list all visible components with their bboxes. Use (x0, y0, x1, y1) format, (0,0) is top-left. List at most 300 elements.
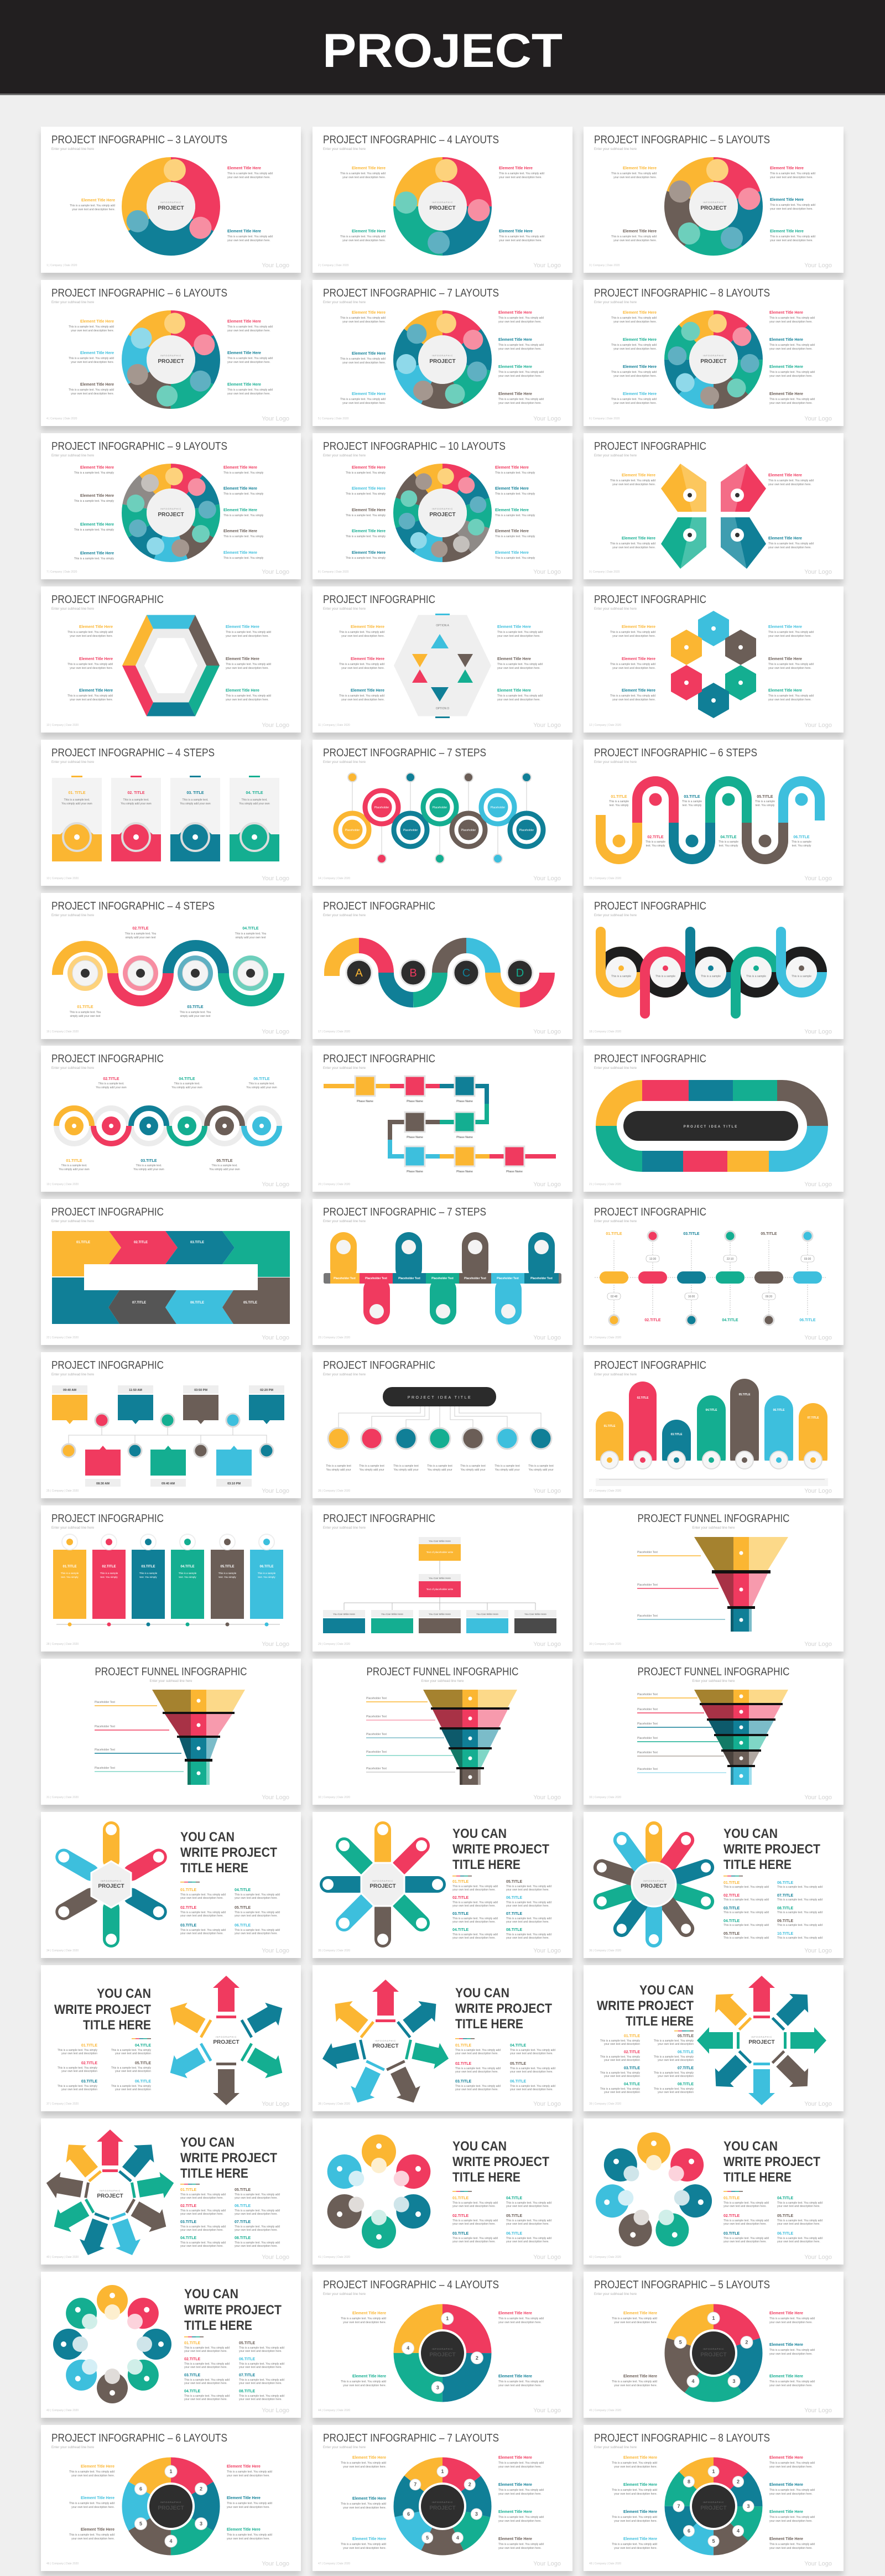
item grid: This is a sample text. You simply (654, 2087, 694, 2091)
footer: 2 | Company | Date 2020 (318, 264, 349, 267)
text items: your own text and description here. (769, 2465, 813, 2469)
text items: your own text and description here. (614, 2520, 657, 2523)
text items (339, 625, 543, 702)
donut chart: PROJECT (429, 205, 456, 211)
text items: Element Title Here (498, 338, 532, 342)
band labels: 05.TITLE (243, 1301, 257, 1305)
footer (589, 416, 832, 422)
funnel labels: Placeholder Text (95, 1748, 115, 1752)
donut chart: 6 (139, 2486, 142, 2492)
item grid: 03.TITLE (180, 2220, 197, 2224)
text items: your own text and description here. (769, 375, 813, 378)
text items: Element Title Here (498, 365, 532, 369)
text items: This is a sample text. You simply add (768, 694, 814, 698)
footer (318, 1181, 561, 1188)
footer (46, 1641, 289, 1648)
donut chart: INFOGRAPHIC (432, 354, 453, 357)
text items: Element Title Here (770, 198, 804, 202)
slide: org chart (313, 1505, 572, 1651)
text items: Element Title Here (227, 230, 261, 233)
item grid: your own text and description here. (239, 2398, 282, 2401)
item grid: 08.TITLE (239, 2390, 256, 2393)
item grid: 01.TITLE (184, 2341, 201, 2345)
title block: WRITE PROJECT (723, 1842, 820, 1857)
donut chart: PROJECT (158, 359, 184, 365)
arrows diagram: INFOGRAPHIC (375, 2039, 396, 2042)
funnel labels: Placeholder Text (366, 1715, 387, 1718)
item grid: This is a sample text. You simply (58, 2066, 97, 2070)
slide title (323, 134, 499, 151)
text items: Element Title Here (495, 466, 529, 470)
item grid: your own text and description (115, 2088, 151, 2091)
footer: Your Logo (804, 722, 832, 729)
text items: This is a sample text. You simply (495, 557, 535, 560)
donut chart (397, 468, 488, 558)
step cards: This is a sample text. (242, 798, 267, 802)
item grid: your own text and description here. (235, 1932, 278, 1935)
footer (589, 1947, 832, 1954)
footer (46, 262, 289, 269)
text items: Element Title Here (223, 551, 257, 555)
text items: Element Title Here (769, 2456, 803, 2460)
text items: Element Title Here (227, 2465, 261, 2469)
labels: This is a sample text. (212, 1164, 237, 1167)
item grid: 01.TITLE (723, 1881, 740, 1885)
text items: Element Title Here (769, 2510, 803, 2514)
slide: time pills timeline (584, 1199, 844, 1345)
footer (589, 2101, 832, 2107)
slide: 6 columns (41, 1505, 301, 1651)
item grid: This is a sample text. You simply add (506, 1917, 551, 1920)
item grid: 04.TITLE (235, 1888, 251, 1892)
text items: This is a sample text. You simply add (611, 344, 657, 347)
time boxes: 09:40 AM (162, 1482, 175, 1486)
footer: Your Logo (262, 416, 289, 422)
text items: your own text and description here. (498, 2321, 542, 2324)
title block (184, 2287, 282, 2337)
ribbon (332, 946, 547, 1000)
text items: This is a sample text. You simply (346, 514, 386, 517)
item grid: your own text and description here. (235, 2245, 278, 2248)
text items: Element Title Here (497, 657, 531, 661)
funnel labels: Placeholder Text (366, 1697, 387, 1700)
text items: This is a sample text. You simply add (499, 235, 544, 238)
donut chart: 6 (688, 2528, 690, 2534)
letter circles: A (355, 967, 363, 979)
donut chart: 1 (712, 2469, 715, 2474)
phase labels: Phase Name (456, 1100, 473, 1103)
timeline: 16:00 (688, 1295, 695, 1299)
slide title: PROJECT INFOGRAPHIC (594, 1053, 706, 1065)
text items: your own text and description here. (768, 698, 811, 702)
timeline: 09:20 (766, 1295, 772, 1299)
title block: TITLE HERE (452, 1857, 520, 1872)
footer: Your Logo (262, 722, 289, 729)
item grid: This is a sample text. You simply add (506, 2201, 551, 2205)
slide title: Enter your subhead line here (323, 914, 366, 917)
arms diagram: PROJECT (369, 1883, 396, 1889)
footer: Your Logo (262, 1334, 289, 1341)
item grid: This is a sample text. You simply add (777, 1886, 822, 1889)
bottom boxes: You Can Write Here (524, 1613, 546, 1616)
text items: This is a sample text. You simply (346, 535, 386, 538)
footer (46, 2101, 289, 2107)
slide title: PROJECT INFOGRAPHIC – 6 LAYOUTS (51, 287, 227, 299)
item grid: This is a sample text. You simply (58, 2049, 97, 2052)
title block (452, 1826, 549, 1877)
slide: funnel 6 (584, 1659, 844, 1805)
text items: Element Title Here (622, 625, 655, 629)
slide: 4 layouts dark (313, 2272, 572, 2418)
text items: This is a sample text. You simply add (340, 316, 386, 320)
item grid: 05.TITLE (678, 2034, 694, 2038)
text items: This is a sample text. You simply (346, 471, 386, 475)
labels: You simply add your own (246, 1086, 277, 1089)
footer (318, 1641, 561, 1648)
funnel labels: Placeholder Text (637, 1551, 658, 1554)
footer: 20 | Company | Date 2020 (318, 1183, 350, 1186)
funnel labels: Placeholder Text (95, 1767, 115, 1770)
slide title: Enter your subhead line here (421, 1680, 464, 1683)
text items: Element Title Here (223, 529, 257, 533)
slide title: Enter your subhead line here (323, 148, 366, 151)
hexagon cluster (671, 611, 756, 718)
ring chain: Placeholder (403, 829, 418, 832)
step labels: simply add your own text (125, 936, 156, 939)
text items: Element Title Here (227, 351, 261, 355)
slide title: PROJECT FUNNEL INFOGRAPHIC (637, 1666, 790, 1678)
slide title: Enter your subhead line here (692, 1680, 735, 1683)
donut chart: 3 (747, 2504, 750, 2509)
arms diagram: PROJECT (98, 1883, 124, 1889)
footer: 8 | Company | Date 2020 (318, 570, 349, 574)
text items: Element Title Here (623, 2510, 657, 2514)
slide: 6 layouts dark (41, 2425, 301, 2571)
donut chart: 3 (475, 2511, 478, 2517)
donut chart: PROJECT (429, 512, 456, 518)
text items: Element Title Here (81, 199, 115, 202)
text items (340, 167, 544, 242)
step labels: text. You simply (719, 844, 738, 848)
text items: your own text and description here. (499, 239, 542, 242)
donut chart: INFOGRAPHIC (432, 2501, 453, 2504)
arch bars: 06.TITLE (773, 1409, 785, 1412)
labels: You simply add your own (209, 1168, 240, 1171)
step labels: This is a sample (609, 800, 629, 803)
slide: time boxes (41, 1352, 301, 1498)
footer: 13 | Company | Date 2020 (46, 877, 79, 880)
ring chain: Placeholder (519, 829, 534, 832)
text items: your own text and description here. (227, 2537, 270, 2541)
title block (597, 1983, 694, 2032)
item grid: 03.TITLE (624, 2066, 640, 2070)
footer: 9 | Company | Date 2020 (589, 570, 620, 574)
text items: your own text and description here. (497, 635, 540, 638)
footer (46, 875, 289, 882)
arrows diagram: PROJECT (97, 2193, 123, 2199)
slide title: PROJECT INFOGRAPHIC (51, 594, 164, 606)
slide: 6 steps snake (584, 740, 844, 886)
footer: Your Logo (262, 1641, 289, 1648)
footer (46, 416, 289, 422)
labels: This is a sample text. (98, 1082, 124, 1086)
text items: your own text and description here. (227, 361, 270, 364)
footer: Your Logo (262, 1947, 289, 1954)
arrows diagram (320, 1980, 451, 2108)
item grid: your own text and description here. (180, 2245, 223, 2248)
text items: Element Title Here (768, 657, 802, 661)
text items: This is a sample text. You simply add (612, 2380, 657, 2383)
slide title: PROJECT INFOGRAPHIC (323, 1359, 435, 1372)
title block (455, 1986, 552, 2039)
step labels: 04.TITLE (720, 835, 737, 839)
slide: 7 steps timeline (313, 1199, 572, 1345)
branch text: You simply add your (428, 1468, 452, 1472)
item grid: 02.TITLE (452, 2214, 469, 2218)
item grid: This is a sample text. You simply (58, 2085, 97, 2088)
slide: 8 arrows text left (584, 1965, 844, 2111)
step labels: 03.TITLE (187, 1005, 204, 1009)
slide title: PROJECT INFOGRAPHIC (323, 1513, 435, 1525)
text items: your own text and description here. (342, 176, 386, 179)
slide title: Enter your subhead line here (323, 2293, 366, 2296)
footer: Your Logo (533, 2561, 561, 2567)
item grid: your own text and description here. (777, 2240, 820, 2243)
text items: This is a sample text. You simply (346, 557, 386, 560)
branch text (326, 1464, 554, 1472)
title block (452, 2139, 549, 2192)
timeline bar: Placeholder Text (334, 1277, 356, 1280)
text items: your own text and description here. (227, 392, 270, 396)
circles diagram (321, 2134, 437, 2248)
slide title (594, 1359, 706, 1377)
item grid: This is a sample text. You simply add (777, 1924, 822, 1927)
step cards: You simply add your own (121, 802, 152, 806)
item grid: This is a sample text. You simply add (777, 2219, 822, 2222)
slide title: PROJECT INFOGRAPHIC (51, 1513, 164, 1525)
text items: your own text and description here. (227, 2506, 270, 2509)
footer (46, 1181, 289, 1188)
title block (723, 1826, 820, 1877)
text items: Element Title Here (351, 689, 384, 693)
item grid: This is a sample text. You simply add (777, 2237, 822, 2240)
item grid: This is a sample text. You simply add (235, 2225, 280, 2229)
item grid: 01.TITLE (624, 2034, 640, 2038)
timeline (595, 1231, 827, 1325)
text items: Element Title Here (623, 2375, 657, 2378)
footer: 12 | Company | Date 2020 (589, 724, 621, 727)
text items: This is a sample text. You simply add (769, 2380, 815, 2383)
text items: your own text and description here. (612, 698, 655, 702)
item grid: 06.TITLE (777, 2232, 794, 2236)
labels: 04.TITLE (179, 1077, 195, 1081)
text items: Element Title Here (352, 529, 386, 533)
item grid: 02.TITLE (81, 2061, 97, 2065)
text items: your own text and description here. (226, 667, 269, 670)
text items: your own text and description here. (769, 347, 813, 351)
text items: Element Title Here (223, 508, 257, 512)
inner title pill: PROJECT IDEA TITLE (684, 1125, 738, 1129)
text items: Element Title Here (623, 392, 657, 396)
columns: This is a sample (139, 1572, 158, 1575)
footer: Your Logo (262, 2561, 289, 2567)
donut chart: 5 (139, 2521, 142, 2526)
footer: Your Logo (533, 1181, 561, 1188)
footer: 45 | Company | Date 2020 (589, 2409, 621, 2412)
footer: 7 | Company | Date 2020 (46, 570, 77, 574)
item grid: 06.TITLE (235, 2204, 251, 2208)
step labels (609, 795, 811, 848)
slide title: Enter your subhead line here (51, 914, 95, 917)
text items: Element Title Here (352, 487, 386, 491)
item grid: your own text and description (115, 2070, 151, 2073)
text items: This is a sample text. You simply add (498, 316, 544, 320)
step labels: text. You simply (792, 844, 811, 848)
arms diagram: INFOGRAPHIC (372, 1879, 393, 1882)
slide: funnel 4 (41, 1659, 301, 1805)
arrows diagram (697, 1976, 826, 2105)
text items: your own text and description here. (497, 667, 540, 670)
slide: 4 steps wave (41, 893, 301, 1039)
slide title: Enter your subhead line here (323, 607, 366, 611)
footer: 30 | Company | Date 2020 (589, 1643, 621, 1646)
slide: 8 circles (41, 2272, 301, 2418)
circle chain (56, 1108, 279, 1144)
footer (318, 1029, 561, 1035)
phase labels: Phase Name (407, 1170, 423, 1173)
phase labels: Phase Name (506, 1170, 523, 1173)
text items: your own text and description here. (71, 2474, 114, 2478)
item grid: 01.TITLE (180, 2188, 197, 2192)
footer: Your Logo (262, 1181, 289, 1188)
text items: your own text and description here. (341, 698, 384, 702)
funnel labels: Placeholder Text (637, 1722, 658, 1726)
step labels: 06.TITLE (793, 835, 810, 839)
text items: This is a sample text. You simply add (612, 2543, 657, 2546)
text items: your own text and description here. (613, 176, 657, 179)
text items: This is a sample text. You simply add (340, 235, 386, 238)
text items: This is a sample text. You simply add (770, 204, 815, 207)
slide title: Enter your subhead line here (594, 1373, 637, 1377)
columns: This is a sample (179, 1572, 197, 1575)
item grid: 05.TITLE (239, 2341, 256, 2345)
text items: Element Title Here (227, 2496, 261, 2500)
text items: Element Title Here (352, 311, 386, 315)
text items (611, 311, 815, 405)
item grid: 06.TITLE (777, 1881, 794, 1885)
item grid: your own text and description here. (506, 2240, 549, 2243)
donut chart: 1 (169, 2469, 173, 2474)
arch bars (595, 1379, 829, 1486)
text items: Element Title Here (769, 311, 803, 315)
footer (46, 1488, 289, 1494)
slide: 8 arms (313, 1812, 572, 1958)
columns: This is a sample (61, 1572, 79, 1575)
text items: This is a sample text. You simply add (769, 2317, 815, 2320)
text items: Element Title Here (623, 2312, 657, 2315)
branch text: This is a sample text (494, 1464, 520, 1468)
text items: This is a sample text. You simply add (610, 694, 655, 698)
branch text: You simply add your (326, 1468, 351, 1472)
slide title: Enter your subhead line here (594, 2446, 637, 2449)
text items: Element Title Here (499, 230, 533, 233)
donut chart: 5 (712, 2538, 715, 2544)
text items: your own text and description here. (614, 2492, 657, 2496)
step circles (67, 955, 268, 991)
text items: your own text and description here. (341, 635, 384, 638)
footer: Your Logo (262, 1488, 289, 1494)
title block: YOU CAN (452, 1826, 507, 1841)
text items: Element Title Here (498, 2375, 532, 2378)
text items: your own text and description here. (70, 698, 113, 702)
donut chart: INFOGRAPHIC (703, 354, 724, 357)
item grid: your own text and description (604, 2075, 640, 2078)
slide title: Enter your subhead line here (692, 1526, 735, 1530)
text items: Element Title Here (80, 552, 114, 555)
item grid: your own text and description here. (180, 1897, 223, 1900)
donut chart: 1 (446, 2316, 449, 2321)
donut chart: 7 (414, 2482, 417, 2487)
text items: Element Title Here (80, 320, 114, 324)
slide title: PROJECT INFOGRAPHIC (594, 1206, 706, 1218)
columns: text. You simply (61, 1576, 79, 1578)
text items: your own text and description here. (343, 2465, 386, 2469)
arms diagram (320, 1821, 446, 1947)
text items: your own text and description here. (342, 402, 386, 405)
text items: Element Title Here (623, 311, 657, 315)
footer: Your Logo (804, 2561, 832, 2567)
item grid: 09.TITLE (777, 1919, 794, 1923)
slide: 6 circles (313, 2118, 572, 2265)
item grid: 05.TITLE (777, 2214, 794, 2218)
text items: This is a sample text. You simply add (611, 172, 657, 175)
text items: Element Title Here (352, 551, 386, 555)
item grid: your own text and description (61, 2088, 97, 2091)
item grid: your own text and description here. (180, 2229, 223, 2232)
text items: This is a sample text. You simply add (340, 172, 386, 175)
funnel (423, 1690, 517, 1785)
item grid: 04.TITLE (723, 1919, 740, 1923)
item grid: This is a sample text. You simply add (455, 2085, 501, 2088)
footer: 37 | Company | Date 2020 (46, 2102, 79, 2106)
text items: your own text and description here. (612, 635, 655, 638)
donut chart (123, 158, 216, 243)
text items: This is a sample text. You simply add (227, 2533, 272, 2537)
labels (59, 1077, 277, 1171)
timeline: 03:30 (804, 1258, 811, 1261)
donut chart: 5 (426, 2535, 429, 2541)
footer (318, 722, 561, 729)
slide title: PROJECT INFOGRAPHIC – 6 STEPS (594, 747, 757, 759)
item grid: This is a sample text. You simply add (180, 2241, 226, 2245)
footer: Your Logo (262, 2101, 289, 2107)
text items: your own text and description here. (498, 2384, 542, 2387)
text items: Element Title Here (80, 466, 114, 470)
time boxes: 08:30 AM (96, 1482, 110, 1486)
step cards: You simply add your own (61, 802, 92, 806)
footer: 22 | Company | Date 2020 (46, 1336, 79, 1339)
text items (69, 2465, 272, 2541)
text items: Element Title Here (623, 2483, 657, 2487)
footer (318, 2407, 561, 2414)
slide: 9 layouts (41, 433, 301, 579)
item grid: This is a sample text. You simply add (180, 2225, 226, 2229)
slide title (594, 594, 706, 611)
item grid: 04.TITLE (506, 2196, 523, 2200)
item grid: This is a sample text. You simply add (723, 1898, 769, 1902)
text items: This is a sample text. You simply add (498, 2461, 544, 2465)
text items (612, 2312, 815, 2387)
